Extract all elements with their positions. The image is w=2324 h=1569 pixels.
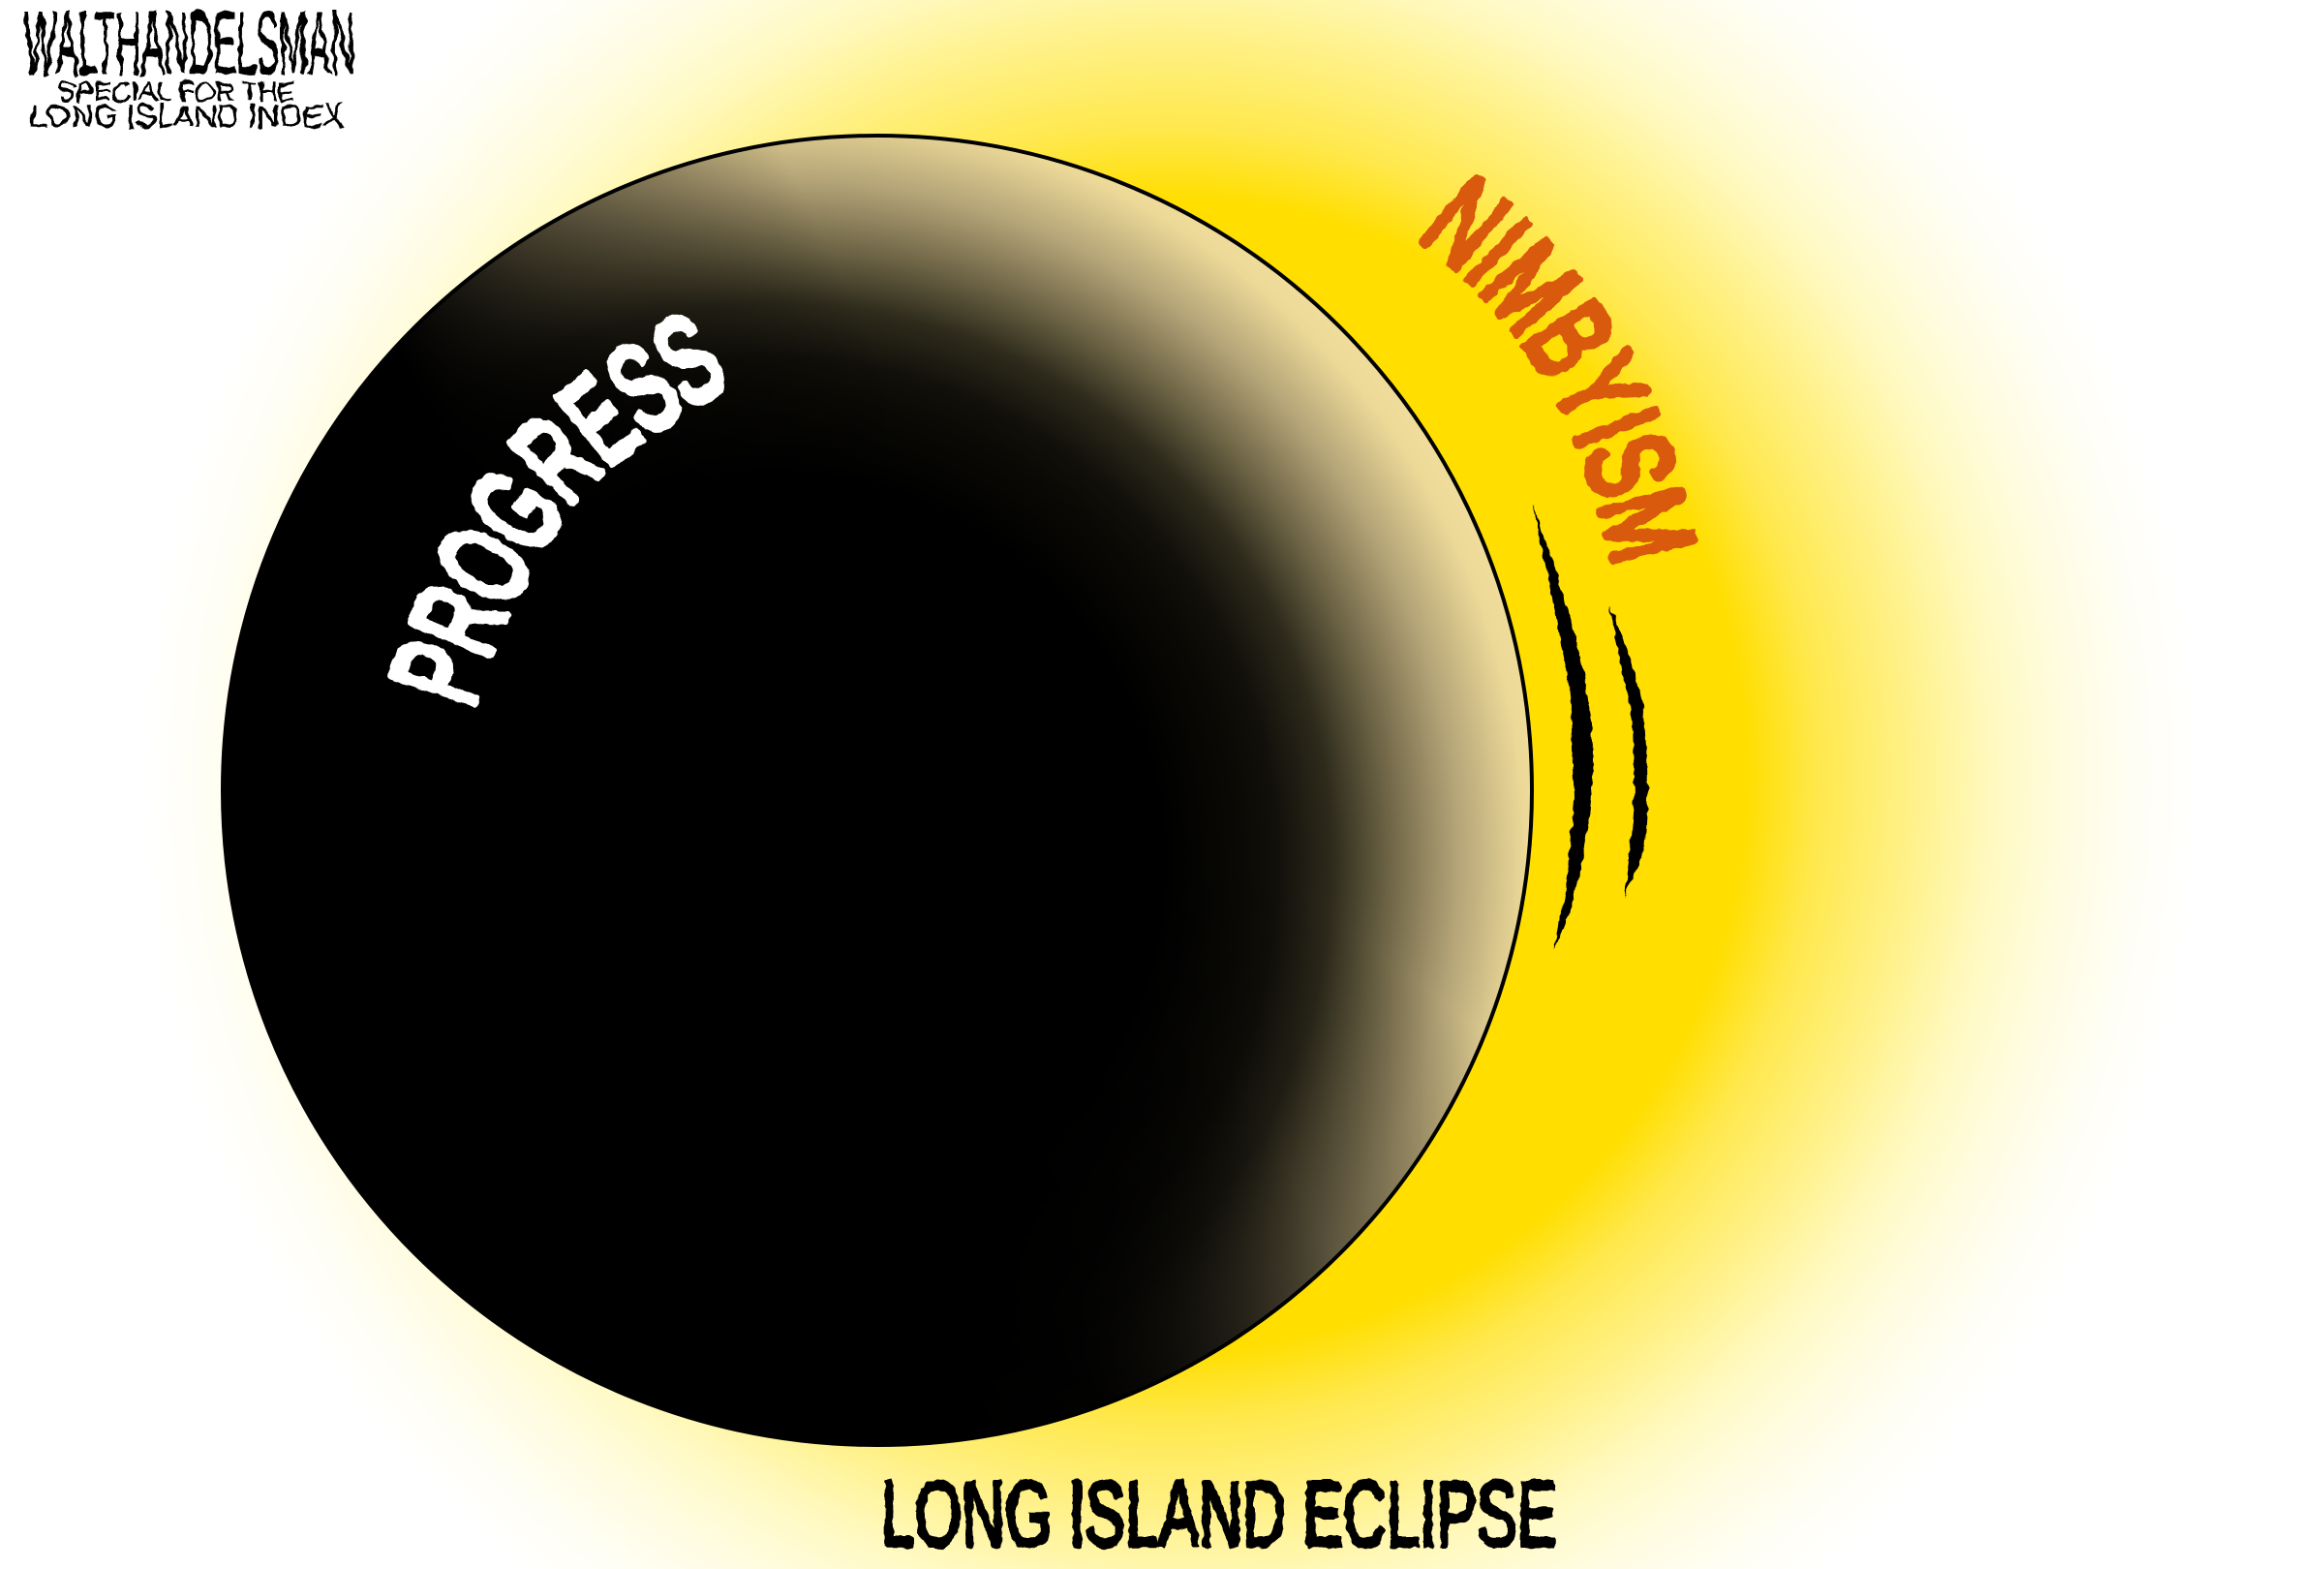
- scratch mark: small: [1609, 605, 1648, 898]
- eclipse disc: [223, 136, 1532, 1445]
- artist signature: LONG ISLAND INDEX: [29, 99, 344, 134]
- artist signature: [24, 0, 355, 134]
- label: NIMBYISM: NIMBYISM: [1419, 174, 1698, 566]
- artist signature: SPECIAL FOR THE: [58, 77, 295, 107]
- label: PROGRESS: PROGRESS: [387, 314, 724, 708]
- scratch mark: large: [1533, 505, 1593, 949]
- caption: Long Island Eclipse: LONG ISLAND ECLIPSE: [881, 1462, 1557, 1566]
